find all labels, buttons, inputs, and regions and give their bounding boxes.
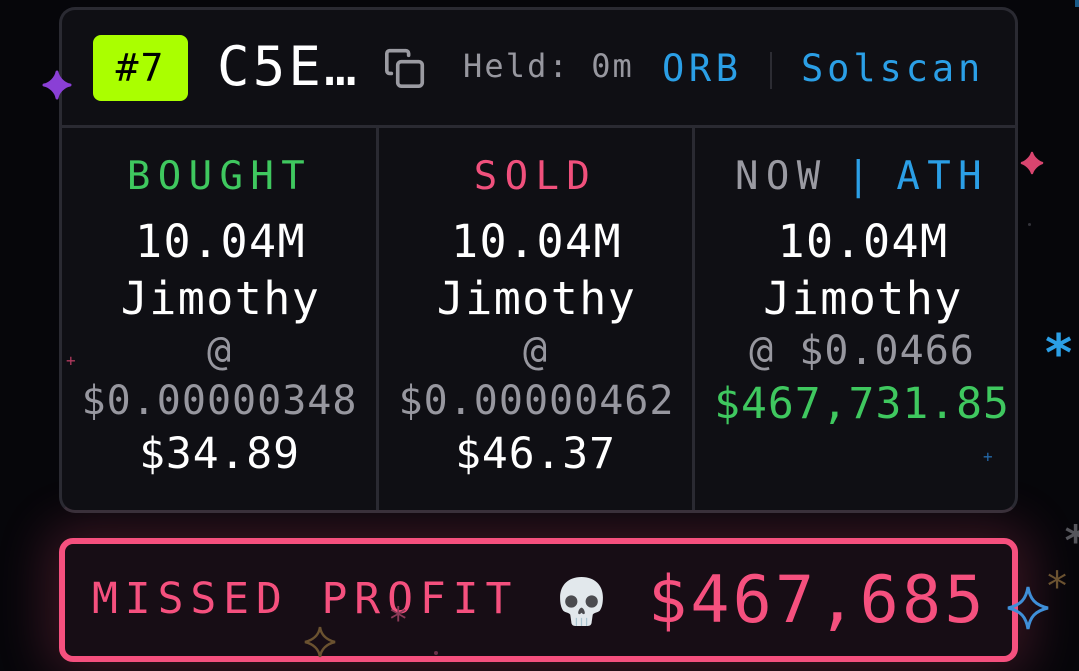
icon: blue outline sparkle bbox=[1008, 586, 1048, 630]
now ath label: NOW | ATH bbox=[735, 154, 989, 199]
link: ORB: ORB bbox=[662, 47, 743, 90]
missed profit amount: $467,685 bbox=[648, 563, 987, 638]
icon: skull bbox=[560, 577, 603, 626]
bought at: @ bbox=[207, 328, 232, 374]
missed profit label: MISSED PROFIT bbox=[92, 574, 518, 624]
rank badge: #7 bbox=[116, 46, 165, 90]
rank badge bbox=[93, 35, 188, 101]
now token: Jimothy bbox=[763, 272, 963, 325]
link: Solscan: Solscan bbox=[801, 47, 984, 90]
sold amount: 10.04M bbox=[451, 215, 622, 268]
panel: token card bbox=[59, 7, 1018, 513]
icon: pink plus: + bbox=[66, 351, 76, 370]
icon: grey dot bbox=[1028, 223, 1031, 226]
sold token: Jimothy bbox=[437, 272, 636, 325]
icon: pink star: * bbox=[388, 600, 408, 640]
icon: pink dot bbox=[434, 651, 438, 655]
bought value: $34.89 bbox=[139, 429, 300, 479]
bought price: $0.00000348 bbox=[82, 378, 357, 424]
icon: tan outline sparkle bbox=[304, 626, 336, 658]
header divider bbox=[62, 125, 1015, 128]
sold value: $46.37 bbox=[455, 429, 616, 479]
icon: brown star: * bbox=[1045, 564, 1069, 610]
icon: purple sparkle bbox=[42, 70, 72, 100]
link separator bbox=[770, 52, 772, 89]
sold label: SOLD bbox=[474, 154, 597, 199]
pink glow behind missed profit bbox=[59, 538, 1018, 662]
column: bought bbox=[82, 154, 357, 479]
bought label: BOUGHT bbox=[127, 154, 312, 199]
icon: copy bbox=[385, 48, 424, 88]
column: sold bbox=[399, 154, 674, 479]
bought amount: 10.04M bbox=[135, 215, 306, 268]
column divider 2 bbox=[692, 125, 695, 510]
ath value: $467,731.85 bbox=[714, 379, 1010, 429]
token name: C5E… bbox=[217, 35, 360, 98]
panel: missed profit bbox=[59, 538, 1018, 662]
column divider 1 bbox=[376, 125, 379, 510]
held time: Held: 0m bbox=[463, 47, 634, 85]
now amount: 10.04M bbox=[778, 215, 948, 268]
sold at: @ bbox=[523, 328, 548, 374]
now price: @ $0.0466 bbox=[749, 328, 975, 374]
icon: blue star: * bbox=[1043, 324, 1074, 384]
icon: blue plus: + bbox=[983, 447, 993, 466]
bought token: Jimothy bbox=[121, 272, 320, 325]
column: now and ath bbox=[714, 154, 1010, 429]
sold price: $0.00000462 bbox=[399, 378, 674, 424]
icon: blue star top bbox=[1075, 0, 1079, 7]
icon: pink sparkle bbox=[1020, 152, 1044, 174]
